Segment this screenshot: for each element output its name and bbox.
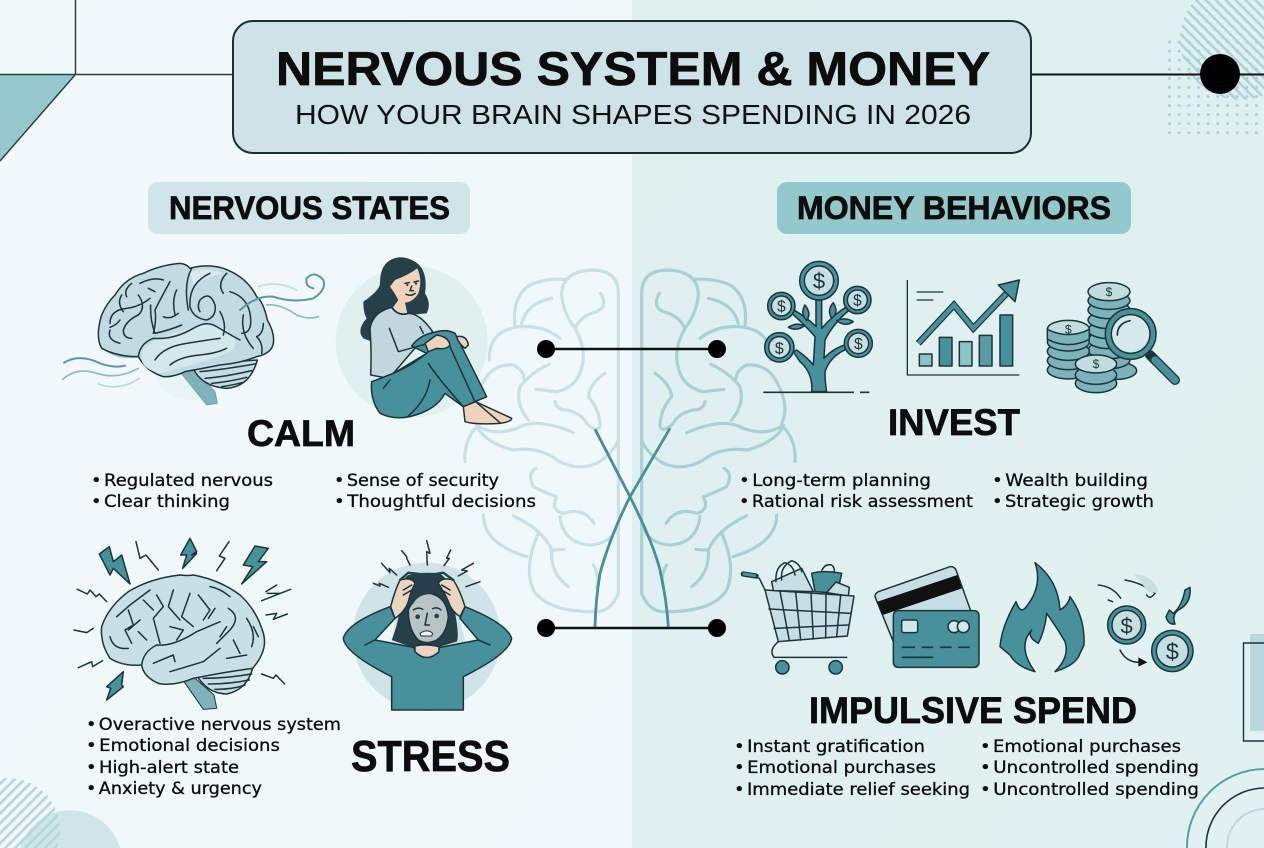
list: stress [86,715,341,798]
list: impulsive spend right [980,737,1199,799]
icon: calm brain [63,263,324,405]
list: invest right: • Wealth building [992,471,1148,490]
decoration: bottom-left corner [0,778,120,848]
list: stress: • Emotional decisions [86,736,280,755]
list: calm right: • Sense of security [334,471,499,490]
illustration: calm woman sitting [336,257,512,424]
airflow lines [63,275,324,387]
list: calm left: • Clear thinking [91,492,230,511]
decoration: bottom-right corner [1187,634,1264,848]
icon: coin stacks with magnifier: $ [1093,357,1100,371]
background: right panel [632,0,1264,848]
icon: money tree: $ [775,340,784,357]
crossing connector lines [595,428,670,627]
list: invest right: • Strategic growth [992,492,1154,511]
list: calm left [91,471,273,511]
list: impulsive spend left: • Emotional purchases [734,758,936,777]
icon: shopping cart [743,561,854,674]
icon: falling coins: $ [1166,639,1179,665]
list: impulsive spend left [734,737,970,799]
right hemisphere [642,270,795,612]
icon: falling coins [1098,573,1193,672]
list: invest right [992,471,1154,511]
icon: credit cards [875,567,979,667]
list: stress: • Overactive nervous system [86,715,341,734]
decoration: top-right corner [1031,0,1264,136]
list: calm right [334,471,536,511]
icon: money tree [763,261,872,392]
list: impulsive spend left: • Instant gratification [734,737,925,756]
heading: invest: INVEST [888,402,1020,443]
central brain outline [465,270,795,612]
section heading: nervous states [148,182,470,234]
list: impulsive spend right: • Uncontrolled spending [980,758,1199,777]
heading: impulsive spend: IMPULSIVE SPEND [809,690,1137,731]
list: invest left: • Long-term planning [739,471,931,490]
section heading: nervous states: NERVOUS STATES [169,190,450,226]
lightning bolts [74,538,291,700]
title: NERVOUS SYSTEM & MONEY [276,43,990,96]
background: left panel [0,0,632,848]
decoration: top-left corner [0,0,233,161]
icon: falling coins: $ [1121,613,1133,638]
icon: money tree: $ [777,299,786,316]
icon: coin stacks with magnifier [1047,283,1175,393]
icon: stressed brain [74,538,291,709]
section heading: money behaviors [777,182,1131,234]
heading: stress: STRESS [351,732,510,781]
icon: coin stacks with magnifier: $ [1106,285,1113,299]
icon: money tree: $ [854,336,863,353]
icon: money tree: $ [813,269,825,294]
list: impulsive spend right: • Emotional purchases [980,737,1181,756]
list: impulsive spend right: • Uncontrolled spending [980,780,1199,799]
heading: calm: CALM [247,413,355,454]
section heading: money behaviors: MONEY BEHAVIORS [797,190,1111,226]
list: invest left: • Rational risk assessment [739,492,974,511]
icon: money tree: $ [853,293,862,310]
list: calm left: • Regulated nervous [91,471,273,490]
list: calm right: • Thoughtful decisions [334,492,536,511]
connector: stress to impulsive spend [537,619,726,637]
list: impulsive spend left: • Immediate relief seeking [734,780,970,799]
icon: flame [1000,563,1084,672]
left hemisphere [465,270,618,612]
list: invest left [739,471,974,511]
connector: calm to invest [537,340,726,358]
icon: growth chart [907,280,1019,375]
illustration: stressed woman [343,541,512,711]
list: stress: • Anxiety & urgency [86,779,262,798]
icon: coin stacks with magnifier: $ [1065,322,1072,336]
list: stress: • High-alert state [86,758,239,777]
title banner [233,21,1031,153]
subtitle: HOW YOUR BRAIN SHAPES SPENDING IN 2026 [295,99,971,130]
